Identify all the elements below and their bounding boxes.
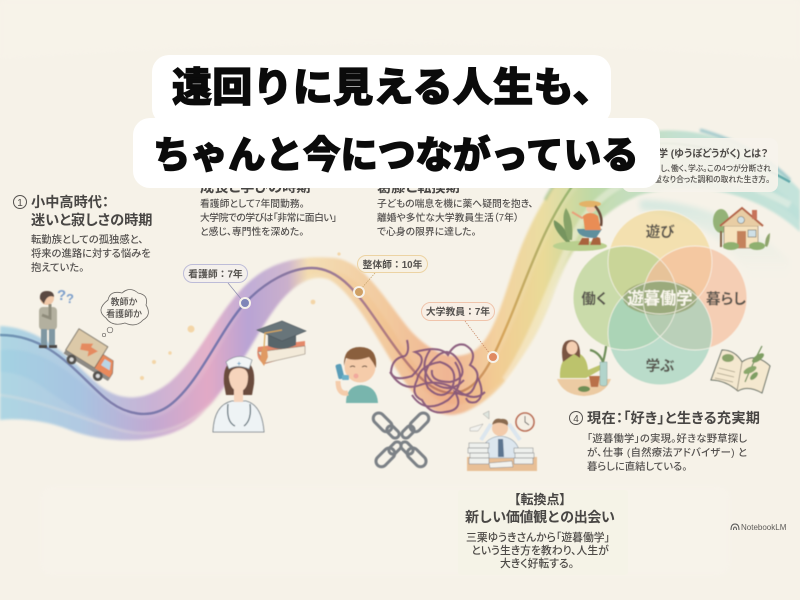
pill: chiropractor 10 years: 整体師：10年 <box>363 258 423 271</box>
title box line 2 <box>133 118 660 188</box>
top-right definition panel <box>621 138 778 192</box>
venn diagram: 暮らし <box>706 291 746 308</box>
panel: turning point: 三栗ゆうきさんから「遊暮働学」 <box>466 530 610 544</box>
icon: open book with herbs <box>711 346 770 393</box>
icon: boy with inhaler <box>335 347 378 403</box>
heading panel 1: childhood: 小中高時代： <box>31 194 109 211</box>
icon: tangled thread <box>390 340 485 412</box>
heading panel 2: nurse: 看護師として7年間勤務。 <box>200 197 305 210</box>
venn diagram: 学ぶ <box>646 357 675 375</box>
icon: thinking person <box>39 287 74 348</box>
icon: broken chains <box>371 411 431 469</box>
panel: turning point <box>458 490 628 575</box>
heading panel 2: nurse: 大学院での学びは「非常に面白い」 <box>200 211 337 224</box>
icon: woman with plants <box>557 340 611 396</box>
heading panel 2: nurse: と感じ、専門性を深めた。 <box>200 225 304 238</box>
heading panel 2: nurse: 成長と学びの時期 <box>200 179 311 196</box>
icon: graduation cap and books <box>257 321 306 366</box>
pill: university teacher 7 years: 大学教員：7年 <box>426 305 490 318</box>
heading panel 4: present: 「遊暮働学」の実現。好きな野草探し <box>587 432 747 445</box>
heading panel 3: conflict: で心身の限界に達した。 <box>377 225 476 238</box>
heading panel 2: nurse <box>200 179 337 238</box>
title box line 1 <box>152 55 611 125</box>
icon: stressed man at desk <box>467 411 537 471</box>
pill: chiropractor 10 years <box>354 256 428 297</box>
panel: turning point: 新しい価値観との出会い <box>465 509 615 525</box>
heading panel 4: present: 現在：「好き」と生きる充実期 <box>587 410 760 427</box>
heading panel 1: childhood: 将来の進路に対する悩みを <box>31 247 151 260</box>
heading panel 3: conflict: 子どもの喘息を機に薬へ疑問を抱き、 <box>377 197 533 210</box>
heading panel 4: present: が、仕事 (自然療法アドバイザー) と <box>587 446 747 459</box>
pill: university teacher 7 years <box>422 302 498 362</box>
top-right definition panel: 遊暮働学 (ゆうぼどうがく) とは？ <box>628 147 768 160</box>
icon: thinking person: ? <box>57 287 66 304</box>
thought bubble: teacher or nurse: 教師か <box>111 296 137 307</box>
top-right definition panel: 遊び、暮らし、働く、学ぶ。この4つが分断され <box>627 163 771 173</box>
thought bubble: teacher or nurse: 看護師か <box>106 308 142 319</box>
heading panel 1: childhood: 抱えていた。 <box>31 261 84 274</box>
venn diagram <box>573 210 747 385</box>
panel: turning point: という生き方を教わり、人生が <box>471 543 609 557</box>
pill: nurse 7 years: 看護師：7年 <box>188 268 243 280</box>
venn diagram: 遊び <box>646 223 675 241</box>
ribbon: life path wave <box>0 130 800 440</box>
top-right definition panel: ず、互いに重なり合った調和の取れた生き方。 <box>621 174 770 184</box>
heading panel 4: present <box>570 410 760 473</box>
icon: nurse: + <box>237 361 241 368</box>
icon: gardener <box>553 201 607 251</box>
NotebookLM watermark: NotebookLM <box>741 523 787 532</box>
timeline main line <box>0 143 790 414</box>
icon: house <box>713 208 770 250</box>
heading panel 1: childhood: 迷いと寂しさの時期 <box>31 212 152 229</box>
heading panel 1: childhood <box>14 194 152 274</box>
icon: thinking person: ? <box>66 291 74 306</box>
heading panel 3: conflict: 葛藤と転換期 <box>377 179 460 196</box>
heading panel 3: conflict: 離婚や多忙な大学教員生活（7年） <box>377 211 519 224</box>
thought bubble: teacher or nurse <box>101 290 148 337</box>
icon: nurse <box>213 356 264 432</box>
decorative dots <box>140 252 341 380</box>
heading panel 1: childhood: 転勤族としての孤独感と、 <box>31 233 143 246</box>
panel: turning point: 大きく好転する。 <box>500 556 574 570</box>
title line 2: ちゃんと今につながっている <box>153 134 639 176</box>
heading panel 1: childhood: 1 <box>17 198 23 209</box>
pill: nurse 7 years <box>184 264 250 308</box>
venn diagram: 遊暮働学 <box>627 289 693 308</box>
title line 1: 遠回りに見える人生も、 <box>172 66 613 110</box>
heading panel 4: present: 4 <box>573 414 579 425</box>
heading panel 3: conflict <box>377 179 533 238</box>
venn diagram: 働く <box>581 291 607 308</box>
panel: turning point: 【転換点】 <box>514 492 566 507</box>
heading panel 4: present: 暮らしに直結している。 <box>587 460 687 473</box>
icon: moving truck <box>60 329 123 386</box>
